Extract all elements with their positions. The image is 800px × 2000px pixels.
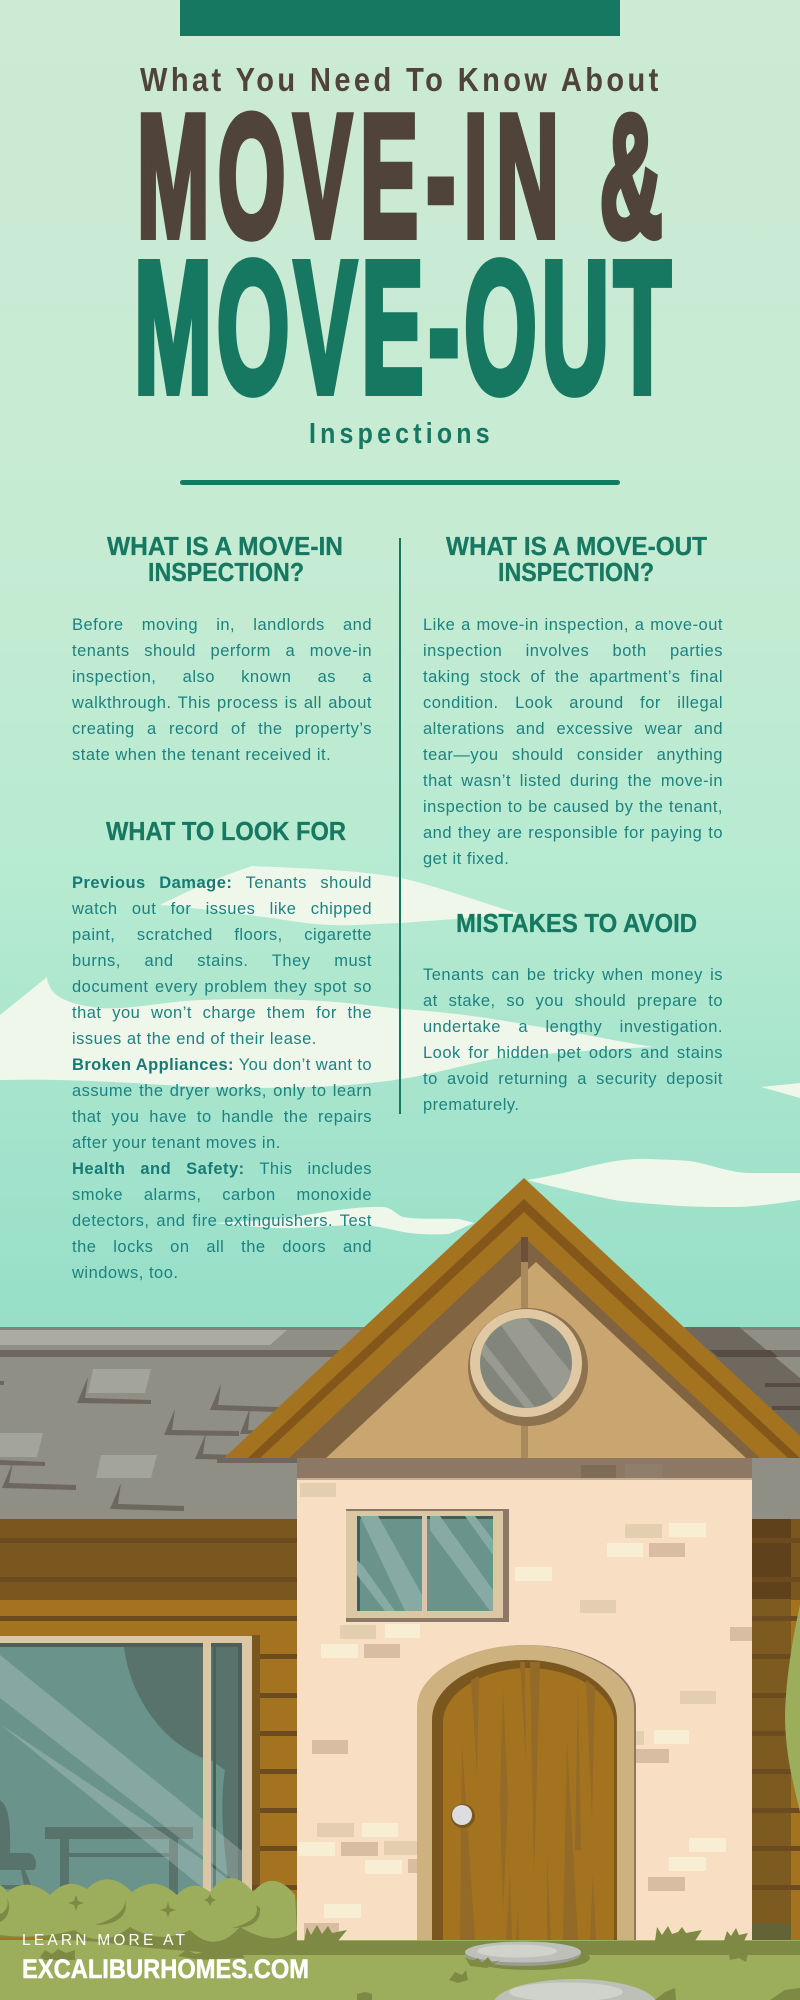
text: move-in inspection paragraph: Before moving in, landlords and: [72, 616, 372, 634]
text: move-in inspection paragraph: [72, 616, 372, 764]
text: mistakes to avoid paragraph: to avoid returning a security deposit: [423, 1070, 723, 1088]
text: move-in inspection paragraph: state when the tenant received it.: [72, 746, 331, 764]
text: what to look for list: Health and Safety: This includes: [72, 1160, 372, 1178]
text: what to look for list: the locks on all the doors and: [72, 1238, 372, 1256]
text: move-out inspection paragraph: that wasn’t listed during the move-in: [423, 772, 723, 790]
footer call to action: [22, 1932, 309, 1984]
gable roof: [224, 1178, 800, 1458]
ground: [0, 1940, 800, 2000]
text: mistakes to avoid paragraph: [423, 966, 723, 1114]
text: what to look for list: burns, and stains. They must: [72, 952, 372, 970]
grass tufts: [40, 1925, 800, 2000]
heading: mistakes to avoid: MISTAKES TO AVOID: [456, 908, 697, 938]
section headings: [106, 531, 707, 938]
door knob: [451, 1804, 475, 1828]
tree at right edge: [785, 1605, 800, 1812]
text: what to look for list: that you won’t charge them for the: [72, 1004, 372, 1022]
text: mistakes to avoid paragraph: Look for hidden pet odors and stains: [423, 1044, 723, 1062]
footer url: EXCALIBURHOMES.COM: [22, 1954, 309, 1984]
bricks: [300, 1483, 716, 1855]
text: what to look for list: document every problem they spot so: [72, 978, 372, 996]
table and chair silhouette: [0, 1800, 193, 1904]
text: move-out inspection paragraph: [423, 616, 723, 868]
text: what to look for list: watch out for issues like chipped: [72, 900, 372, 918]
heading: what is a move-out inspection: WHAT IS A MOVE-OUT: [446, 531, 707, 561]
text: mistakes to avoid paragraph: Tenants can be tricky when money is: [423, 966, 723, 984]
text: what to look for list: Broken Appliances: You don’t want to: [72, 1056, 372, 1074]
round attic window: [468, 1308, 590, 1426]
stepping stones: [465, 1942, 657, 2000]
text: what to look for list: issues at the end of their lease.: [72, 1030, 317, 1048]
top banner: [180, 0, 620, 36]
text: move-out inspection paragraph: and they are responsible for paying to: [423, 824, 723, 842]
text: what to look for list: [72, 874, 372, 1282]
text: move-out inspection paragraph: Like a move-in inspection, a move-out: [423, 616, 723, 634]
heading: what is a move-out inspection: INSPECTION?: [498, 557, 654, 587]
title line: move-out: MOVE-OUT: [134, 224, 671, 432]
front door: [417, 1645, 636, 1941]
text: mistakes to avoid paragraph: prematurely.: [423, 1096, 519, 1114]
text: what to look for list: that you have to handle the repairs: [72, 1108, 372, 1126]
door grain: [460, 1662, 596, 1940]
curtain: [124, 1647, 203, 1758]
upper window: [346, 1509, 509, 1622]
heading: what is a move-in inspection: WHAT IS A MOVE-IN: [107, 531, 343, 561]
text: what to look for list: paint, scratched floors, cigarette: [72, 926, 372, 944]
heading: what is a move-in inspection: INSPECTION?: [148, 557, 304, 587]
bush: [0, 1878, 297, 1955]
text: mistakes to avoid paragraph: at stake, so you should prepare to: [423, 992, 723, 1010]
wood siding: [0, 1519, 800, 1941]
footer label: LEARN MORE AT: [22, 1932, 186, 1949]
text: move-out inspection paragraph: inspection to be caused by the tenant,: [423, 798, 723, 816]
text: move-out inspection paragraph: condition. Look around for illegal: [423, 694, 723, 712]
text: move-in inspection paragraph: creating a record of the property’s: [72, 720, 372, 738]
text: move-out inspection paragraph: get it fixed.: [423, 850, 509, 868]
sky background: [0, 0, 800, 1330]
heading: what is a move-out inspection: [446, 531, 707, 587]
text: move-out inspection paragraph: inspection involves both parties: [423, 642, 723, 660]
text: move-in inspection paragraph: tenants should perform a move-in: [72, 642, 372, 660]
text: move-in inspection paragraph: inspection, also known as a: [72, 668, 372, 686]
glass reflections: [0, 1655, 242, 1912]
text: move-out inspection paragraph: alterations and excessive wear and: [423, 720, 723, 738]
title line: what you need: What You Need To Know About: [140, 61, 658, 98]
left picture window: [0, 1635, 260, 1913]
text: move-out inspection paragraph: taking stock of the apartment’s final: [423, 668, 723, 686]
text: what to look for list: after your tenant moves in.: [72, 1134, 281, 1152]
front wall: [297, 1458, 752, 1941]
title line: move-in: MOVE-IN &: [137, 79, 662, 274]
text: move-in inspection paragraph: walkthrough. This process is all about: [72, 694, 372, 712]
back roof: [0, 1327, 800, 1519]
heading: what to look for: WHAT TO LOOK FOR: [106, 816, 346, 846]
column divider: [399, 538, 401, 1114]
title line: inspections: Inspections: [309, 417, 490, 449]
text: what to look for list: detectors, and fire extinguishers. Test: [72, 1212, 372, 1230]
text: what to look for list: assume the dryer works, only to learn: [72, 1082, 372, 1100]
title underline: [180, 480, 620, 485]
house: [0, 1178, 800, 2000]
text: mistakes to avoid paragraph: undertake a lengthy investigation.: [423, 1018, 723, 1036]
clouds: [0, 866, 800, 1234]
heading: what is a move-in inspection: [107, 531, 343, 587]
title: [134, 61, 671, 449]
text: what to look for list: windows, too.: [72, 1264, 178, 1282]
text: what to look for list: Previous Damage: Tenants should: [72, 874, 372, 892]
text: what to look for list: smoke alarms, carbon monoxide: [72, 1186, 372, 1204]
text: move-out inspection paragraph: tear—you should consider anything: [423, 746, 723, 764]
